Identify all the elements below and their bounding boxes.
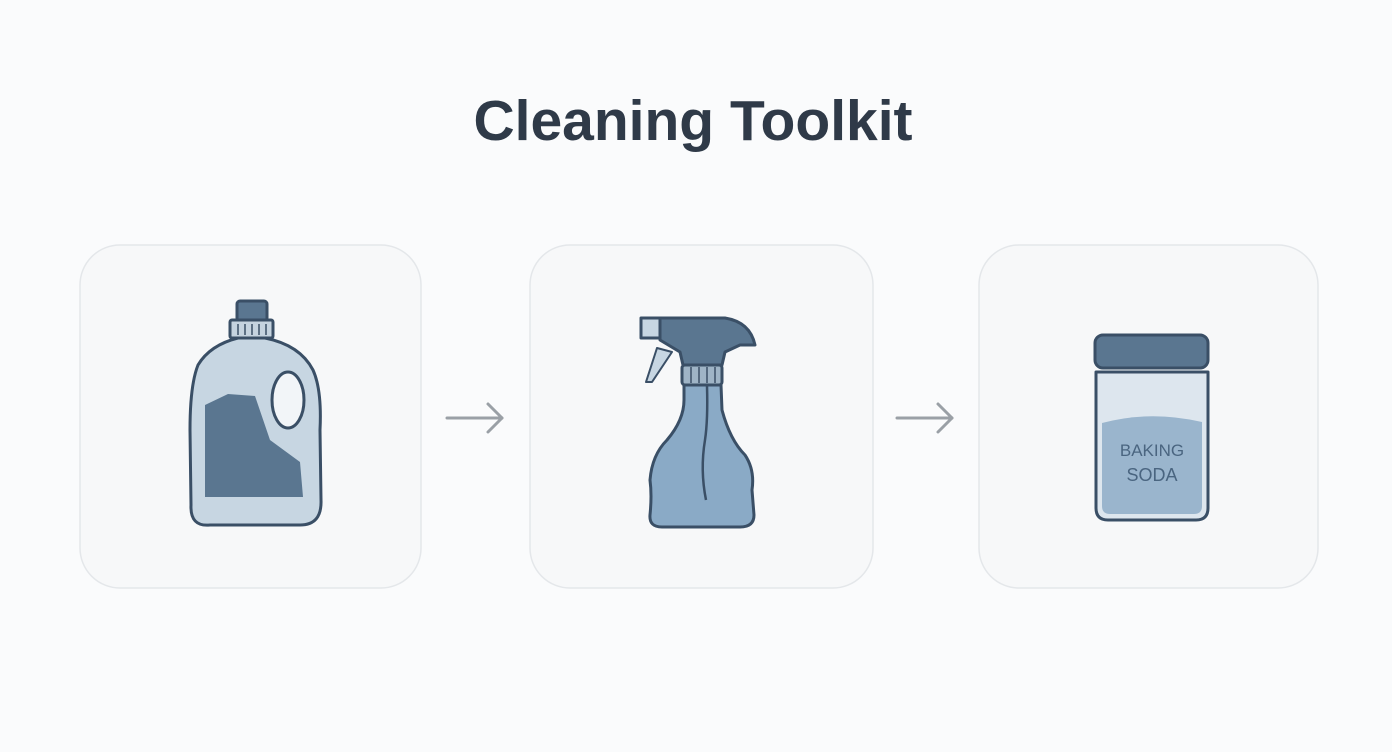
icon: detergent bottle	[190, 301, 321, 525]
icon: spray bottle	[641, 318, 755, 527]
panel: baking soda	[979, 245, 1318, 588]
arrow 1	[447, 404, 502, 432]
title: Cleaning Toolkit	[473, 89, 913, 153]
panel: spray bottle	[530, 245, 873, 588]
icon: baking soda jar	[1095, 335, 1208, 520]
icon: baking soda jar: SODA	[1126, 465, 1178, 485]
panel: detergent bottle	[80, 245, 421, 588]
arrow 2	[897, 404, 952, 432]
icon: baking soda jar: BAKING	[1120, 441, 1184, 460]
